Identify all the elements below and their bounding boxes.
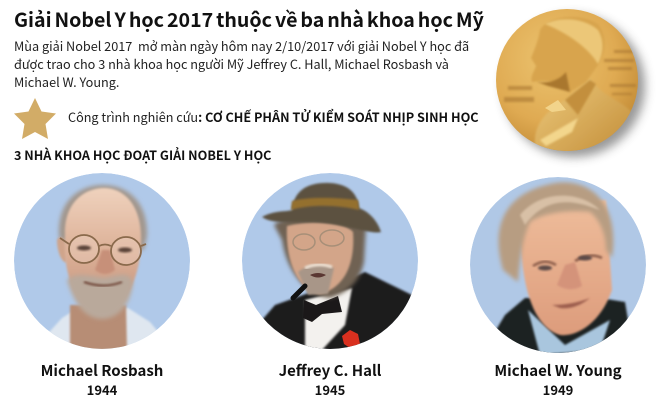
title: Giải Nobel Y học 2017 thuộc về ba nhà khoa học Mỹ	[14, 4, 484, 33]
name: Michael W. Young: Michael W. Young	[494, 360, 622, 381]
year: 1945: 1945	[315, 380, 345, 399]
intro paragraph: được trao cho 3 nhà khoa học người Mỹ Jeffrey C. Hall, Michael Rosbash và	[14, 54, 449, 73]
name: Jeffrey C. Hall: Jeffrey C. Hall	[279, 360, 381, 381]
portrait: Michael W. Young	[470, 177, 646, 360]
year: 1949: 1949	[543, 380, 573, 399]
portrait: Jeffrey C. Hall	[242, 173, 418, 360]
research statement: Công trình nghiên cứu: CƠ CHẾ PHÂN TỬ KIỂM SOÁT NHỊP SINH HỌC	[68, 107, 479, 126]
name: Michael Rosbash: Michael Rosbash	[41, 360, 163, 381]
intro paragraph: Michael W. Young.	[14, 72, 119, 91]
intro paragraph	[14, 36, 469, 91]
icon: gold star	[14, 98, 56, 139]
portrait: Michael Rosbash	[14, 173, 190, 352]
intro paragraph: Mùa giải Nobel 2017 mở màn ngày hôm nay 2/10/2017 với giải Nobel Y học đã	[14, 36, 469, 55]
icon: Nobel medal	[496, 9, 645, 160]
year: 1944: 1944	[87, 380, 117, 399]
section heading: 3 NHÀ KHOA HỌC ĐOẠT GIẢI NOBEL Y HỌC	[14, 145, 271, 164]
